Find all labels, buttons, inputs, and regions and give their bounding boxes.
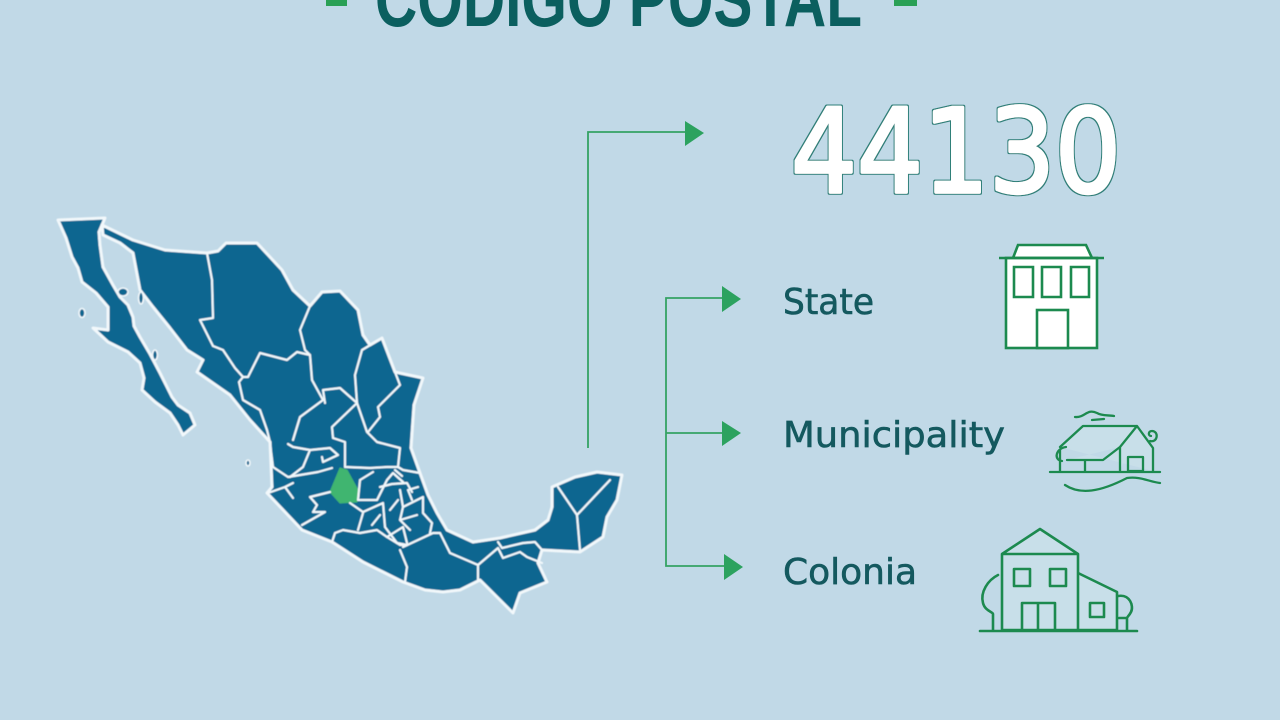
house body	[1002, 529, 1078, 630]
birds / smoke	[1075, 412, 1114, 420]
branch connector with three arrows	[666, 286, 743, 580]
arrowhead	[685, 121, 704, 146]
islands	[79, 288, 250, 466]
arrowhead: colonia	[724, 554, 743, 580]
title: Código Postal	[326, 0, 917, 43]
upper windows	[1014, 569, 1066, 586]
house outline	[1060, 426, 1153, 471]
annex window	[1090, 603, 1104, 617]
Baja California peninsula	[58, 218, 195, 435]
door	[1128, 457, 1143, 471]
door	[1022, 603, 1055, 630]
left tree	[982, 575, 998, 630]
curl	[1149, 431, 1157, 441]
ground line	[1050, 471, 1160, 473]
mainland Mexico	[102, 225, 622, 613]
ground line	[980, 630, 1137, 632]
icon: municipality rural house	[1050, 412, 1160, 491]
label: State: State	[783, 282, 874, 323]
title right dash	[894, 0, 917, 6]
arrow: map to postal code	[588, 121, 704, 448]
title left dash	[326, 0, 347, 6]
annex	[1078, 573, 1117, 630]
door	[1037, 310, 1068, 348]
connector line	[588, 132, 692, 448]
windows	[1014, 267, 1089, 297]
roof	[1013, 245, 1092, 258]
arrowhead: state	[722, 286, 741, 312]
label: Municipality: Municipality	[783, 415, 1005, 456]
building body	[1006, 258, 1097, 348]
branch lines	[666, 298, 726, 566]
map of Mexico	[58, 218, 622, 613]
arrowhead: municipality	[722, 421, 741, 446]
icon: state building	[999, 245, 1104, 348]
tree	[1057, 447, 1066, 461]
state borders	[200, 253, 610, 582]
eave line	[999, 257, 1104, 259]
label: Colonia: Colonia	[783, 552, 917, 593]
icon: colonia house	[980, 529, 1137, 631]
postal code number: 44130	[791, 85, 1121, 220]
right tree	[1118, 596, 1132, 630]
wave	[1065, 478, 1160, 491]
highlighted state (green)	[330, 468, 358, 503]
